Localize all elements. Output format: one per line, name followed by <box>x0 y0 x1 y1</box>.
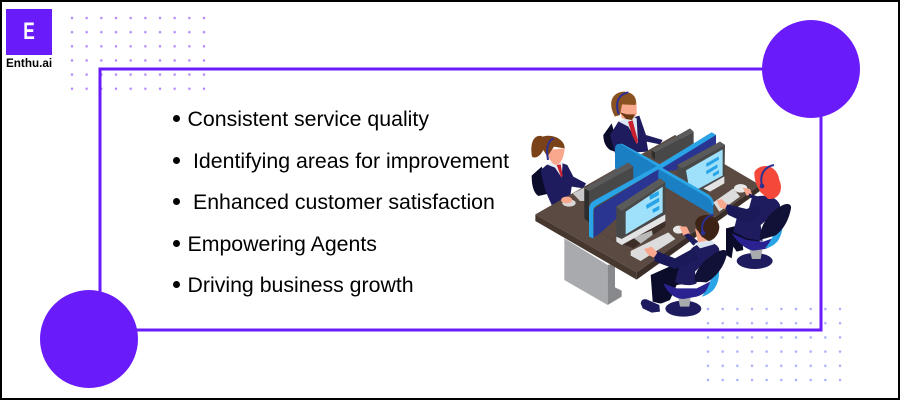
back cubicle panel <box>615 144 662 182</box>
list item: empowering: Empowering Agents <box>188 232 377 256</box>
logo <box>6 9 52 70</box>
back desk items: woman's hand, keyboard, mouse <box>561 188 584 207</box>
list item: quality: Consistent service quality <box>188 107 429 131</box>
logo mark <box>6 9 52 55</box>
front right cubicle panel <box>657 165 714 216</box>
agent: back man <box>603 92 663 153</box>
back monitors <box>584 128 694 222</box>
agent: right woman <box>717 165 791 269</box>
agent: back left woman <box>531 136 586 205</box>
front monitor <box>600 178 665 248</box>
desk <box>535 135 760 280</box>
front left cubicle panel <box>589 164 660 238</box>
keyboards and mice <box>631 184 747 261</box>
list item: satisfaction: Enhanced customer satisfaction <box>193 190 495 214</box>
logo name: Enthu.ai <box>6 57 52 70</box>
list item: growth: Driving business growth <box>188 273 414 297</box>
list item: improvement: Identifying areas for improvement <box>193 149 509 173</box>
agent: front man <box>641 215 727 317</box>
right back divider and monitor <box>658 132 725 193</box>
desk legs <box>564 238 622 305</box>
logo mark: E <box>23 18 35 45</box>
illustration: call center agents at desk <box>531 91 792 317</box>
